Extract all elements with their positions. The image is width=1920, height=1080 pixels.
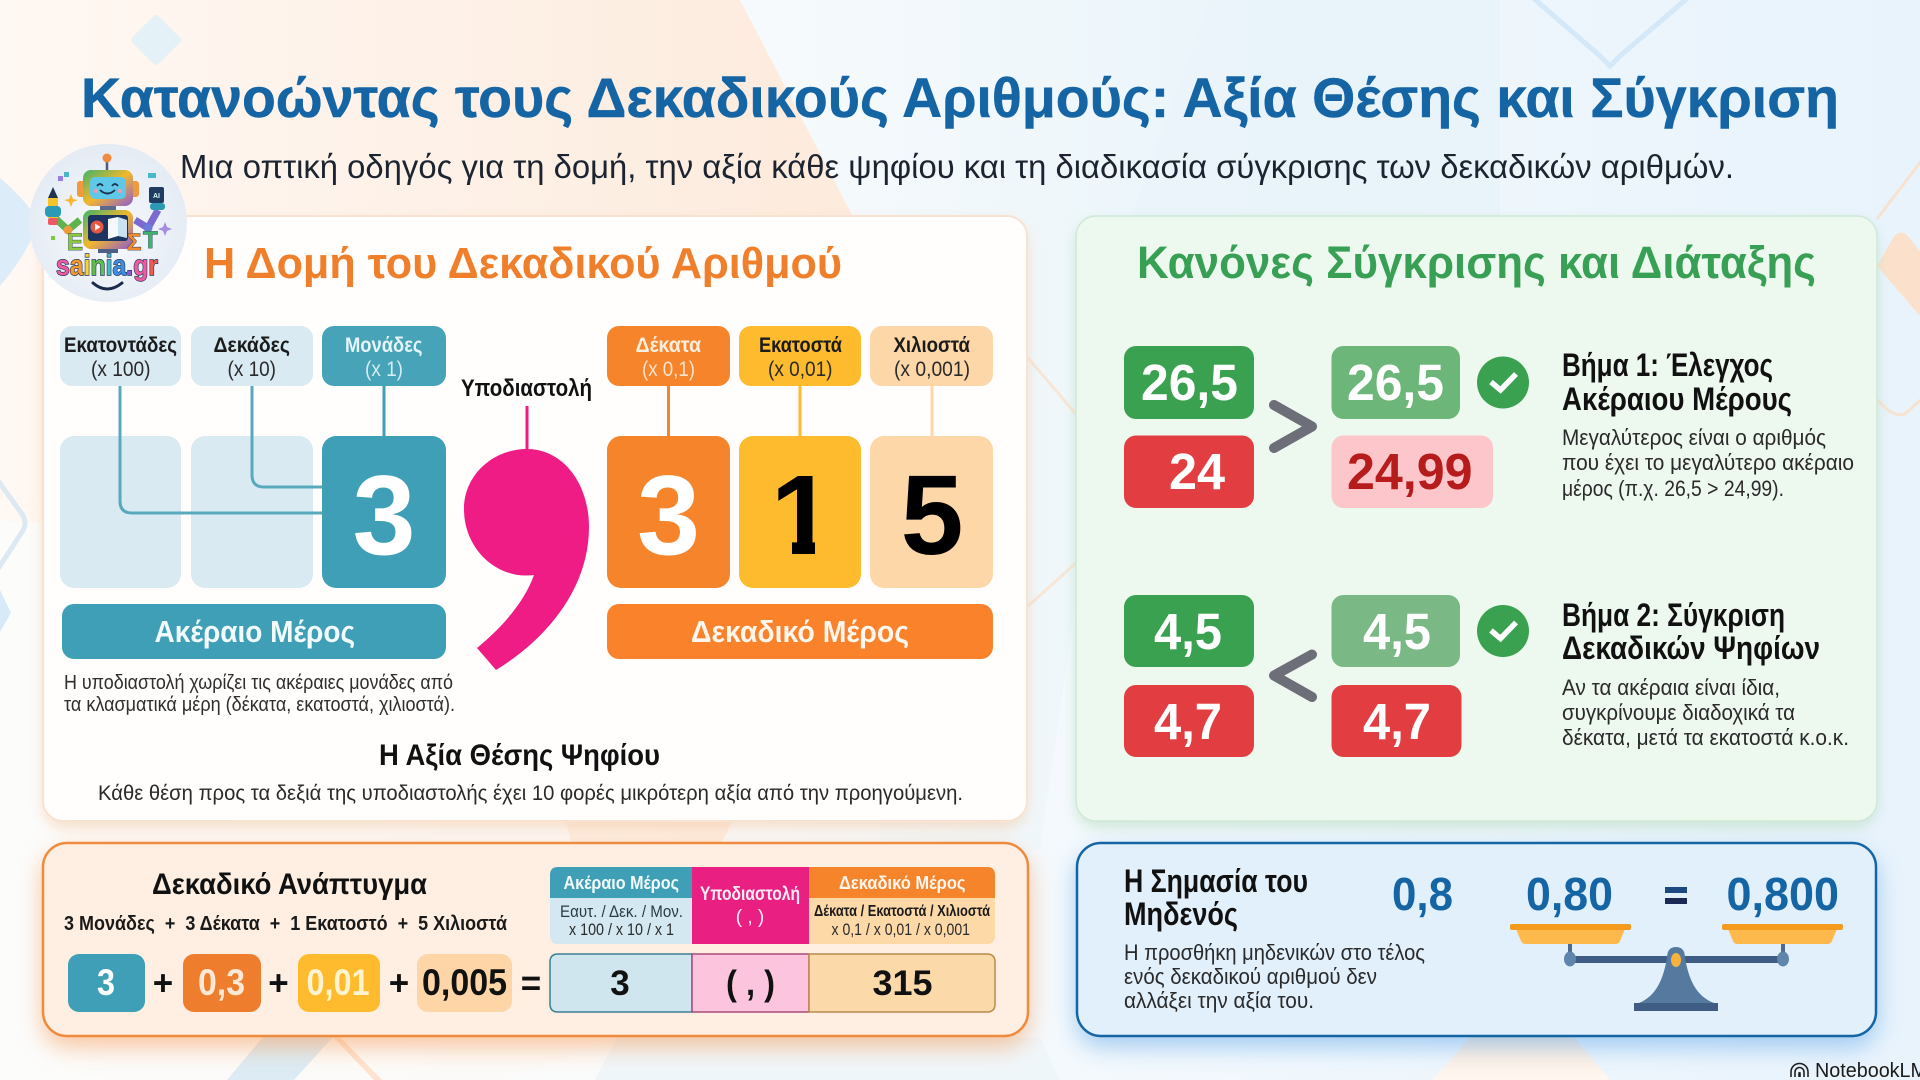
place label: hundredths: (x 0,01) [768, 358, 832, 381]
table value: comma [692, 954, 809, 1012]
place label: thousandths: Χιλιοστά [894, 334, 970, 357]
icon: sainia.gr robot logo: AI [153, 193, 160, 200]
panel heading: Η Δομή του Δεκαδικού Αριθμού [204, 239, 842, 288]
number box: light 26,5: 26,5 [1347, 354, 1444, 411]
place label: thousandths: (x 0,001) [894, 358, 970, 381]
icon: sainia.gr robot logo [29, 144, 187, 302]
digit: units 3: 3 [353, 452, 415, 578]
panel heading: Η Σημασία του [1124, 863, 1308, 899]
number box: 4,7: 4,7 [1154, 693, 1222, 750]
icon: sainia.gr robot logo: Ε [67, 229, 83, 256]
number box: 24,99 [1332, 436, 1493, 508]
panel heading: Δεκαδικό Ανάπτυγμα [152, 868, 428, 901]
number box: light 4,5: 4,5 [1363, 603, 1431, 660]
step 2 description: δέκατα, μετά τα εκατοστά κ.ο.κ. [1562, 725, 1849, 750]
term: 3: 3 [97, 962, 115, 1003]
equation [68, 954, 541, 1012]
place label: hundredths [739, 326, 861, 386]
place label: hundreds [60, 326, 181, 386]
number box: 24,99: 24,99 [1347, 443, 1472, 500]
step 1 description [1562, 425, 1854, 501]
digit: tenths 3 [607, 436, 730, 588]
number box: 4,5 [1124, 595, 1254, 667]
step 2 heading: Δεκαδικών Ψηφίων [1562, 630, 1820, 666]
icon: sainia.gr robot logo: Σ [127, 229, 141, 256]
table header: decimal part [809, 867, 995, 944]
step 1 heading: Βήμα 1: Έλεγχος [1562, 347, 1773, 383]
table value: 3 [550, 954, 692, 1012]
step 1 description: Μεγαλύτερος είναι ο αριθμός [1562, 425, 1826, 450]
icon: sainia.gr robot logo: sainia.gr [56, 250, 158, 282]
decimal comma label: Υποδιαστολή [461, 375, 592, 402]
panel: comparison rules [1076, 216, 1877, 828]
term: 0,3: 0,3 [198, 962, 245, 1003]
icon: check mark [1477, 356, 1529, 408]
panel: importance of zero [1076, 843, 1877, 1047]
table header: integer part [550, 867, 692, 944]
subtitle: Μια οπτική οδηγός για τη δομή, την αξία κάθε ψηφίου και τη διαδικασία σύγκρισης των δεκαδικών αριθμών. [180, 148, 1734, 185]
place label: thousandths [870, 326, 993, 386]
number box: 24: 24 [1169, 443, 1226, 500]
zero description: Η προσθήκη μηδενικών στο τέλος [1124, 940, 1425, 965]
place label: hundreds: Εκατοντάδες [64, 334, 177, 357]
table value: 3: 3 [610, 964, 630, 1003]
table header: decimal part: x 0,1 / x 0,01 / x 0,001 [832, 920, 970, 939]
table header: decimal comma: Υποδιαστολή [700, 884, 800, 905]
table header: decimal comma [692, 867, 809, 944]
place label: tens [191, 326, 313, 386]
panel: structure of the decimal number [43, 216, 1027, 828]
number box: 26,5: 26,5 [1141, 354, 1238, 411]
number box: 4,7 [1124, 685, 1254, 757]
equation: = [521, 964, 541, 1003]
step 1 heading: Ακέραιου Μέρους [1562, 381, 1792, 417]
connector lines [120, 386, 932, 436]
table header: integer part: x 100 / x 10 / x 1 [569, 920, 674, 939]
number box: 4,5: 4,5 [1154, 603, 1222, 660]
step 2 heading: Βήμα 2: Σύγκριση [1562, 597, 1785, 633]
digit: tenths 3: 3 [637, 452, 700, 578]
heading: place value: Η Αξία Θέσης Ψηφίου [379, 739, 660, 772]
number box: light 26,5 [1332, 346, 1460, 419]
panel heading [1124, 863, 1308, 932]
place label: units: Μονάδες [345, 334, 423, 357]
expansion in words: 3 Μονάδες + 3 Δέκατα + 1 Εκατοστό + 5 Χιλιοστά [64, 913, 508, 935]
step 2 heading [1562, 597, 1820, 666]
number box: 26,5 [1124, 346, 1254, 419]
arrow: less than [1274, 654, 1312, 697]
number: 0,8: 0,8 [1392, 868, 1453, 920]
term: 3 [68, 954, 145, 1012]
place label: tens: (x 10) [228, 358, 276, 381]
note on the decimal comma: Η υποδιαστολή χωρίζει τις ακέραιες μονάδες από [64, 672, 453, 694]
arrow: greater than [1274, 405, 1312, 448]
number box: 24 [1124, 436, 1254, 508]
step 1 description: μέρος (π.χ. 26,5 > 24,99). [1562, 476, 1784, 501]
place label: hundreds: (x 100) [91, 358, 150, 381]
zero description: αλλάξει την αξία του. [1124, 988, 1314, 1013]
number: 0,800: 0,800 [1726, 868, 1839, 920]
table header: decimal part: Δέκατα / Εκατοστά / Χιλιοστά [814, 903, 990, 920]
place label: tenths: Δέκατα [636, 334, 701, 357]
equation: + [268, 964, 289, 1003]
panel heading: Μηδενός [1124, 896, 1238, 932]
place label: tenths [607, 326, 730, 386]
digit: thousandths 5 [870, 436, 993, 588]
table header: decimal part: Δεκαδικό Μέρος [839, 872, 966, 893]
term: 0,3 [183, 954, 261, 1012]
place label: units [322, 326, 446, 386]
step 1 heading [1562, 347, 1792, 417]
zero description [1124, 940, 1425, 1013]
panel heading: Κανόνες Σύγκρισης και Διάταξης [1137, 237, 1816, 288]
equals sign [1665, 887, 1687, 904]
term: 0,01: 0,01 [306, 962, 370, 1003]
digit: hundredths 1: 1 [771, 452, 833, 578]
step 1 description: που έχει το μεγαλύτερο ακέραιο [1562, 450, 1854, 475]
step 2 description [1562, 675, 1849, 750]
icon: check mark [1477, 605, 1529, 657]
digit: units 3 [322, 436, 446, 588]
table value: comma: ( , ) [726, 964, 775, 1003]
panel: decimal expansion [42, 843, 1029, 1047]
term: 0,01 [298, 954, 380, 1012]
banner: integer part [62, 604, 446, 659]
place value description: Κάθε θέση προς τα δεξιά της υποδιαστολής έχει 10 φορές μικρότερη αξία από την προηγούμενη. [98, 781, 963, 805]
step 2 description: Αν τα ακέραια είναι ίδια, [1562, 675, 1780, 700]
icon: sainia.gr robot logo: Τ [143, 227, 158, 254]
table header: integer part: Εαυτ. / Δεκ. / Μον. [560, 902, 683, 921]
title: Κατανοώντας τους Δεκαδικούς Αριθμούς: Αξία Θέσης και Σύγκριση [81, 66, 1839, 129]
number box: light 4,5 [1332, 595, 1460, 667]
step 2 description: συγκρίνουμε διαδοχικά τα [1562, 700, 1795, 725]
table header: integer part: Ακέραιο Μέρος [564, 872, 679, 893]
icon: large pink comma [464, 406, 589, 670]
number box: right 4,7 [1332, 685, 1462, 757]
digit: thousandths 5: 5 [901, 452, 963, 578]
equation: + [153, 964, 173, 1003]
table header: decimal comma: ( , ) [736, 907, 764, 928]
step 2 comparison [1124, 595, 1529, 757]
step 1 comparison [1124, 346, 1529, 508]
term: 0,005 [417, 954, 512, 1012]
equation: + [389, 964, 409, 1003]
number box: right 4,7: 4,7 [1363, 693, 1431, 750]
table value: 315 [809, 954, 995, 1012]
note on the decimal comma [64, 672, 455, 716]
banner: integer part: Ακέραιο Μέρος [154, 614, 355, 649]
digit: hundredths 1 [739, 436, 861, 588]
number: 0,80: 0,80 [1526, 868, 1613, 920]
place-value table [550, 867, 995, 1012]
place label: tens: Δεκάδες [214, 334, 290, 357]
place label: units: (x 1) [365, 358, 403, 381]
note on the decimal comma: τα κλασματικά μέρη (δέκατα, εκατοστά, χιλιοστά). [64, 694, 455, 716]
banner: decimal part [607, 604, 993, 659]
place label: tenths: (x 0,1) [642, 358, 695, 381]
icon: balance scale [1510, 924, 1843, 1011]
zero description: ενός δεκαδικού αριθμού δεν [1124, 964, 1377, 989]
place label: hundredths: Εκατοστά [759, 334, 842, 357]
empty digit boxes with connector lines [60, 436, 322, 588]
term: 0,005: 0,005 [422, 962, 507, 1003]
banner: decimal part: Δεκαδικό Μέρος [691, 614, 909, 649]
table value: 315: 315 [872, 964, 932, 1003]
